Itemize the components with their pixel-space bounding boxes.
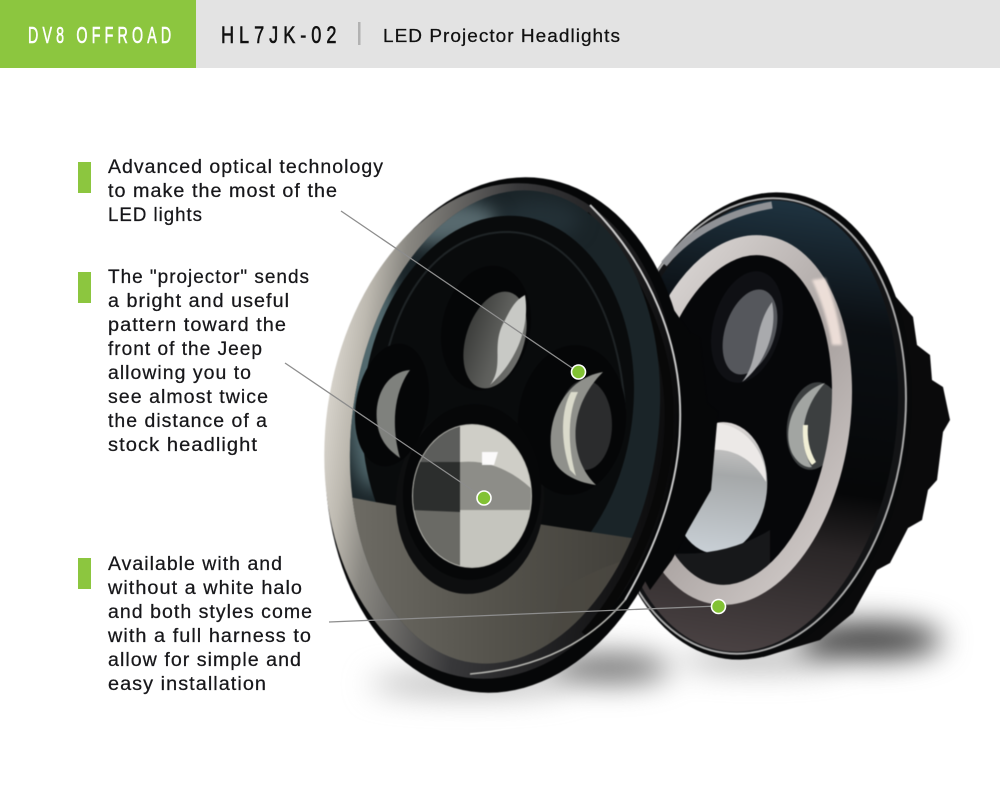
bullet: optical technology: to make the most of the (108, 181, 338, 202)
bullet: projector pattern: allowing you to (108, 363, 252, 384)
bullet: projector pattern: The "projector" sends (108, 267, 310, 288)
bullet: halo and harness: and both styles come (108, 602, 313, 623)
halo highlight (812, 278, 842, 345)
pale upper-left rim (664, 205, 772, 264)
bullet: projector pattern: pattern toward the (108, 315, 287, 336)
bullet: optical technology: LED lights (108, 205, 203, 226)
bullet: halo and harness: allow for simple and (108, 650, 302, 671)
lens rim (576, 178, 934, 674)
back headlight with halo (638, 192, 951, 660)
lower reflection (352, 497, 632, 664)
large lower lens (684, 421, 768, 553)
brand tab: DV8 OFFROAD (28, 24, 171, 49)
front housing (600, 290, 718, 590)
top projector lens (463, 291, 528, 389)
bullet: projector pattern: stock headlight (108, 435, 258, 456)
upper lens (712, 272, 782, 382)
right lens (786, 382, 832, 470)
pale translucent rim (293, 160, 709, 702)
bullet: projector pattern: the distance of a (108, 411, 268, 432)
right lens (550, 372, 626, 486)
bullet: halo and harness (78, 554, 313, 695)
header bar (0, 0, 1000, 68)
back housing (763, 220, 950, 657)
bullet: halo and harness: with a full harness to (107, 626, 312, 647)
right highlight (590, 205, 680, 600)
bullet: optical technology (78, 157, 384, 226)
lower highlight (470, 600, 625, 674)
marker dot: optics (572, 365, 586, 379)
bullet: projector pattern: a bright and useful (108, 291, 290, 312)
lens face (584, 182, 926, 670)
headlight shadows (370, 622, 942, 694)
brand tab (0, 0, 196, 68)
lower bezel (395, 505, 542, 594)
halo ring (616, 232, 864, 608)
bullet: projector pattern: see almost twice (108, 387, 269, 408)
bullet: halo and harness: Available with and (108, 554, 283, 575)
lower lens reflection (712, 423, 766, 482)
black face (364, 215, 634, 532)
bullet: projector pattern: front of the Jeep (108, 339, 263, 360)
lens face (349, 190, 660, 664)
bullet: projector pattern (78, 267, 310, 456)
marker dot: halo (712, 600, 726, 614)
marker dot: projector (477, 491, 491, 505)
left lens (354, 346, 410, 458)
callout lines (285, 211, 718, 622)
front headlight (324, 176, 718, 694)
outer rim (293, 153, 721, 717)
bullet: halo and harness: easy installation (108, 674, 267, 695)
main projector lens (412, 424, 532, 568)
bullet: optical technology: Advanced optical technology (108, 157, 384, 178)
model number: HL7JK-02 (221, 20, 336, 49)
dark lower ring (675, 530, 770, 585)
bullet: halo and harness: without a white halo (107, 578, 303, 599)
product name: LED Projector Headlights (383, 25, 621, 46)
inner face (626, 241, 854, 599)
right dark band (585, 215, 669, 635)
face ring (388, 230, 625, 398)
